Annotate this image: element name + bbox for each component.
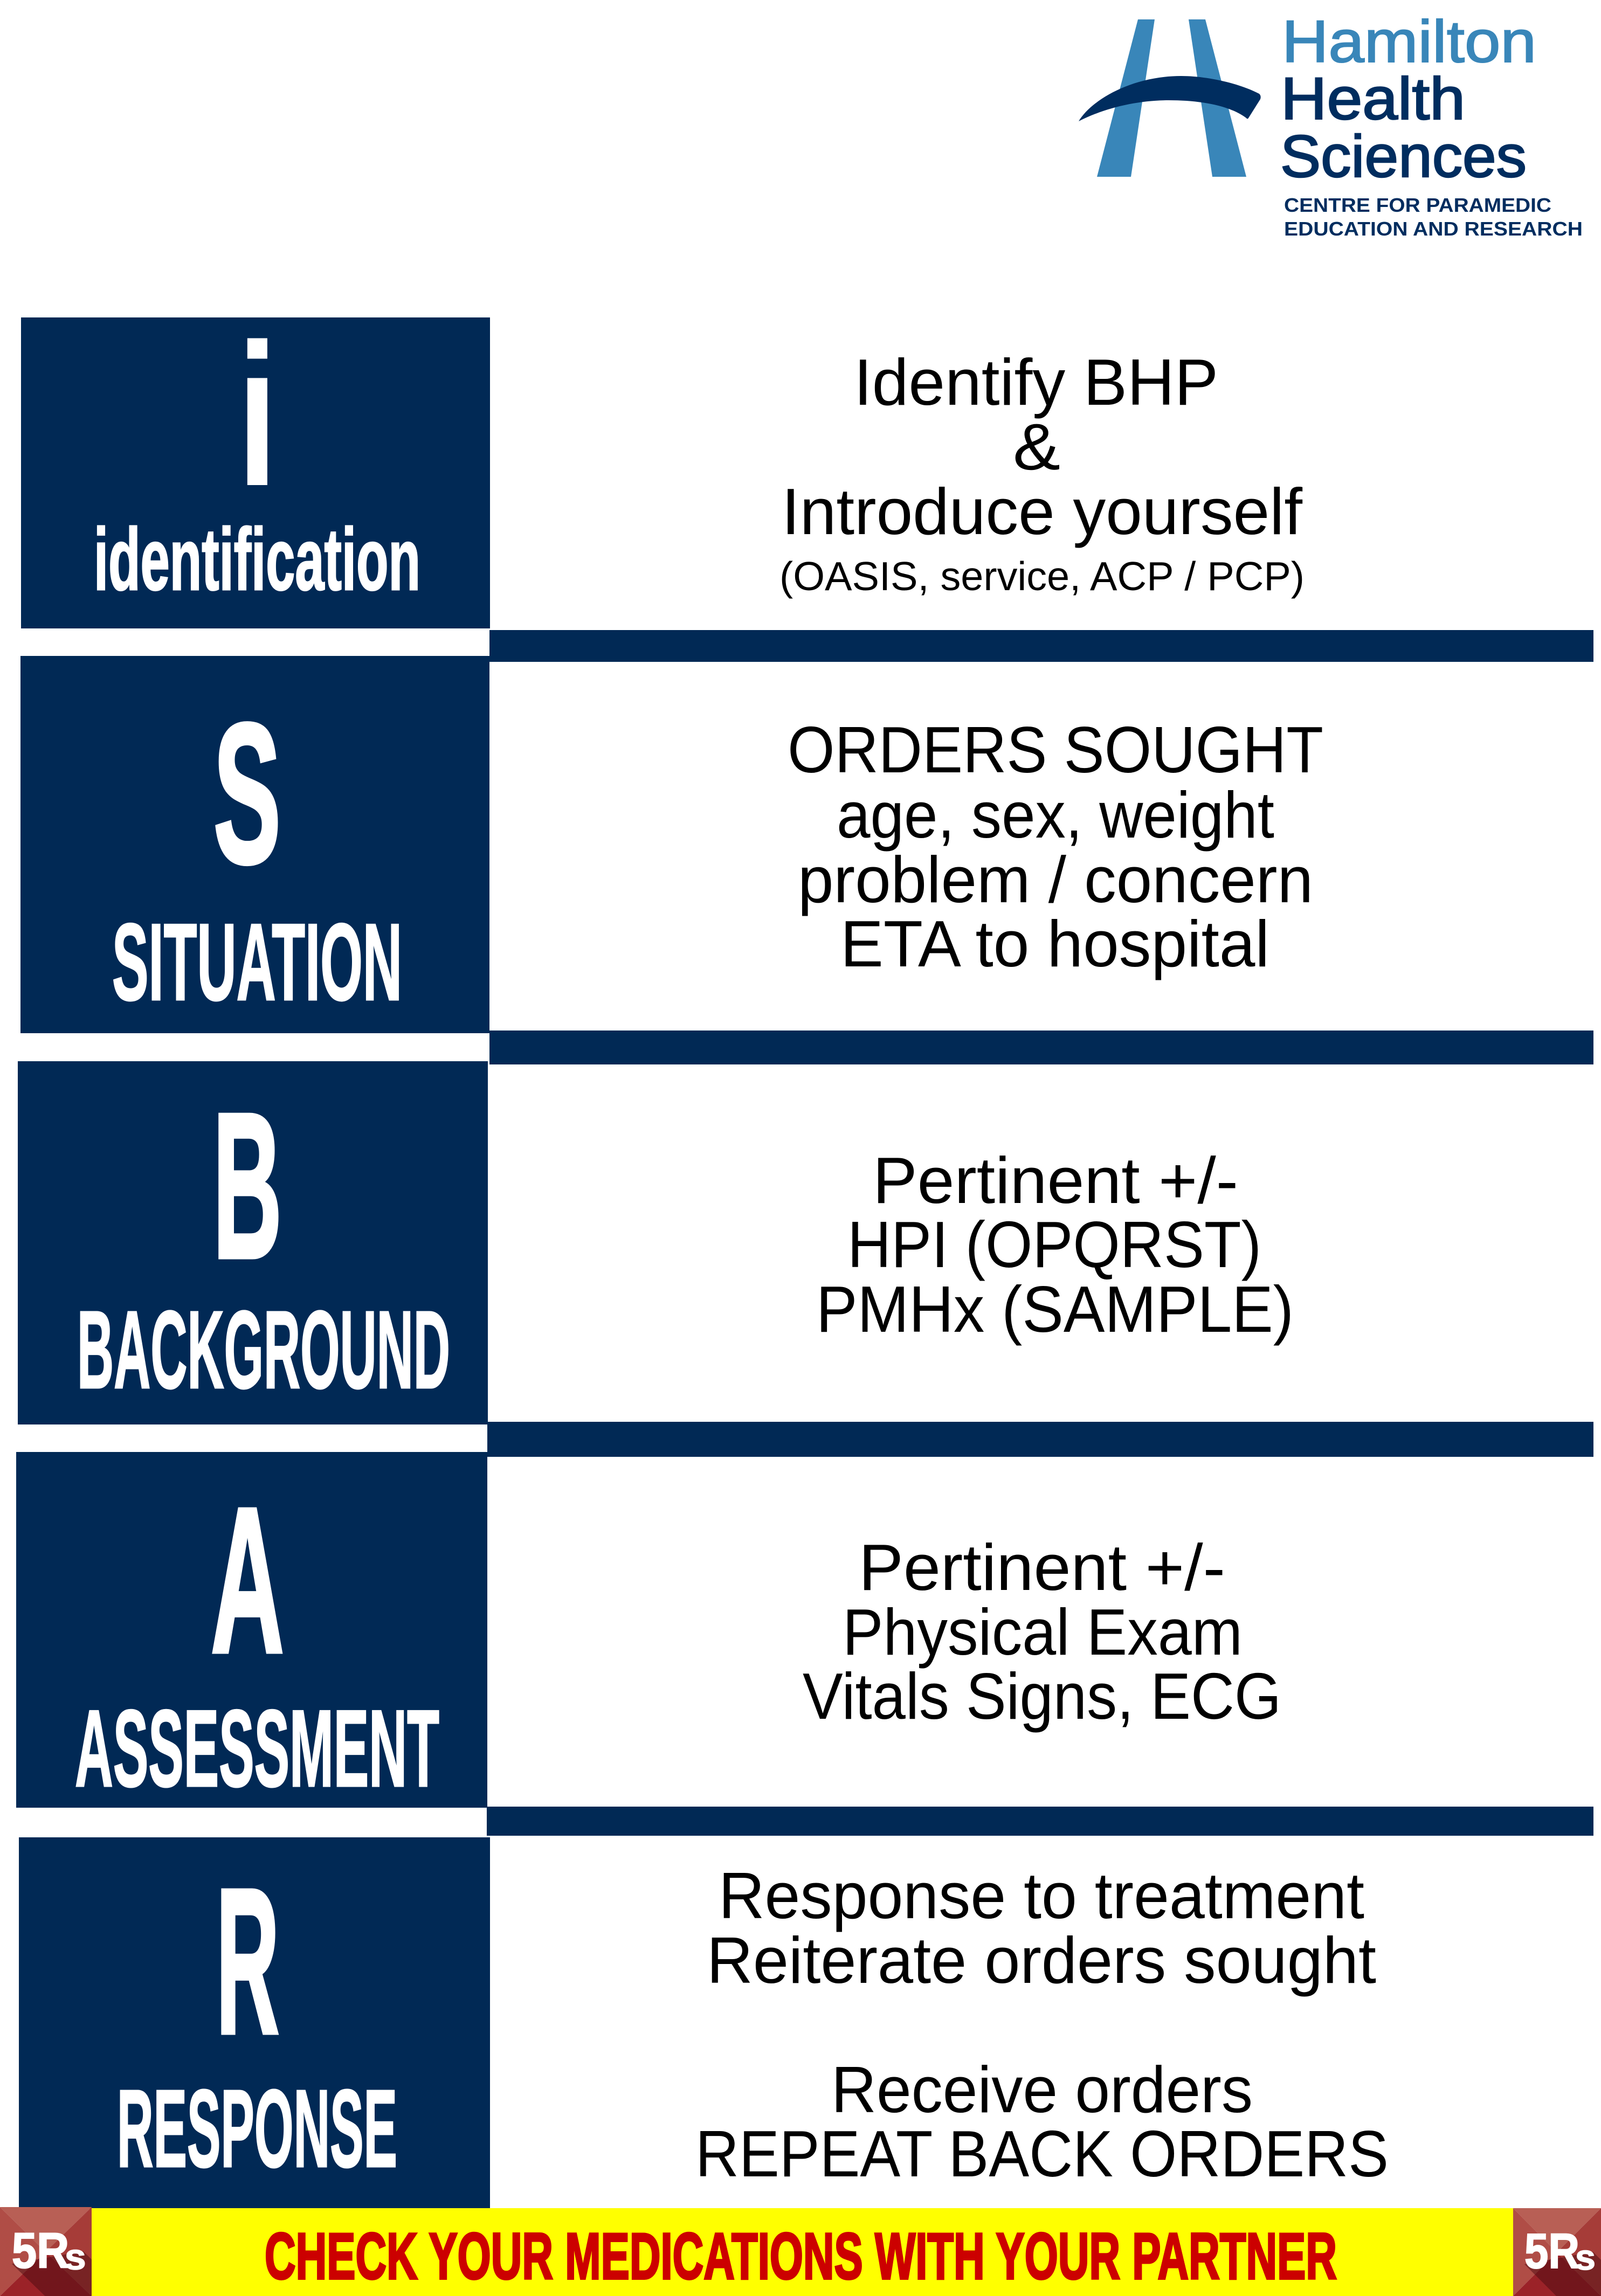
logo text: Sciences: Sciences — [1280, 123, 1527, 190]
icon: 5Rs badge right: s — [1575, 2237, 1596, 2277]
text: identification details: (OASIS, service, ACP / PCP) — [779, 554, 1305, 599]
logo text: education and research: EDUCATION AND RESEARCH — [1284, 218, 1583, 240]
logo: Hamilton Health Sciences — [1079, 9, 1583, 240]
divider bar 4 — [487, 1807, 1593, 1836]
text: assessment details: Physical Exam — [843, 1595, 1243, 1669]
text: situation details: ORDERS SOUGHT — [788, 713, 1323, 786]
panel: response: R — [216, 1845, 279, 2077]
text: situation details — [788, 713, 1323, 980]
panel: background: B — [213, 1069, 282, 1302]
text: identification details: Identify BHP — [854, 345, 1218, 419]
banner: check your medications — [92, 2208, 1513, 2296]
text: situation details: problem / concern — [798, 843, 1313, 916]
text: response details: REPEAT BACK ORDERS — [695, 2117, 1389, 2190]
panel: assessment: A — [211, 1464, 284, 1696]
text: response details — [695, 1859, 1389, 2190]
icon: bridge legs — [1097, 19, 1246, 177]
text: identification details: & — [1013, 410, 1060, 483]
icon: 5Rs badge right — [1513, 2208, 1601, 2296]
logo text: Health: Health — [1281, 66, 1465, 132]
label: identification — [94, 510, 420, 608]
block — [19, 1837, 490, 2209]
icon: 5Rs badge left: s — [65, 2237, 86, 2277]
icon: bridge arc — [1079, 76, 1261, 121]
panel: assessment: ASSESSMENT — [75, 1688, 439, 1810]
panel: response: RESPONSE — [117, 2067, 397, 2190]
block — [20, 656, 489, 1033]
big letter i: i — [237, 302, 278, 528]
text: background details — [816, 1144, 1294, 1346]
panel: identification — [21, 302, 490, 628]
block — [21, 317, 490, 628]
text: response details: Response to treatment — [719, 1859, 1364, 1932]
divider bar 3 — [487, 1422, 1593, 1457]
text: identification details: Introduce yourself — [782, 475, 1303, 548]
panel: response — [19, 1837, 490, 2209]
block — [16, 1452, 487, 1808]
text: background details: PMHx (SAMPLE) — [816, 1273, 1294, 1346]
panel: situation: SITUATION — [112, 901, 402, 1023]
panel: background: BACKGROUND — [77, 1288, 450, 1412]
text: assessment details — [803, 1531, 1281, 1733]
panel: background — [18, 1061, 488, 1424]
icon: 5Rs badge left: 5R — [12, 2223, 69, 2279]
text: identification details — [779, 345, 1305, 599]
text: assessment details: Pertinent +/- — [859, 1531, 1225, 1604]
text: situation details: ETA to hospital — [840, 907, 1269, 980]
divider bar 2 — [489, 1031, 1593, 1064]
text: response details: Receive orders — [831, 2053, 1253, 2126]
logo text: Hamilton: Hamilton — [1282, 9, 1536, 75]
text: background details: Pertinent +/- — [873, 1144, 1238, 1217]
block — [18, 1061, 488, 1424]
text: situation details: age, sex, weight — [837, 778, 1274, 852]
text: assessment details: Vitals Signs, ECG — [803, 1659, 1281, 1733]
text: response details: Reiterate orders sought — [707, 1924, 1376, 1997]
panel: situation — [20, 656, 489, 1033]
logo text: centre for paramedic: CENTRE FOR PARAMEDIC — [1284, 194, 1551, 216]
icon: 5Rs badge left — [0, 2207, 92, 2296]
text: background details: HPI (OPQRST) — [847, 1208, 1261, 1281]
panel: assessment — [16, 1452, 487, 1810]
divider bar 1 — [489, 630, 1593, 662]
icon: 5Rs badge right: 5R — [1524, 2224, 1579, 2279]
big letter S: S — [213, 682, 281, 905]
